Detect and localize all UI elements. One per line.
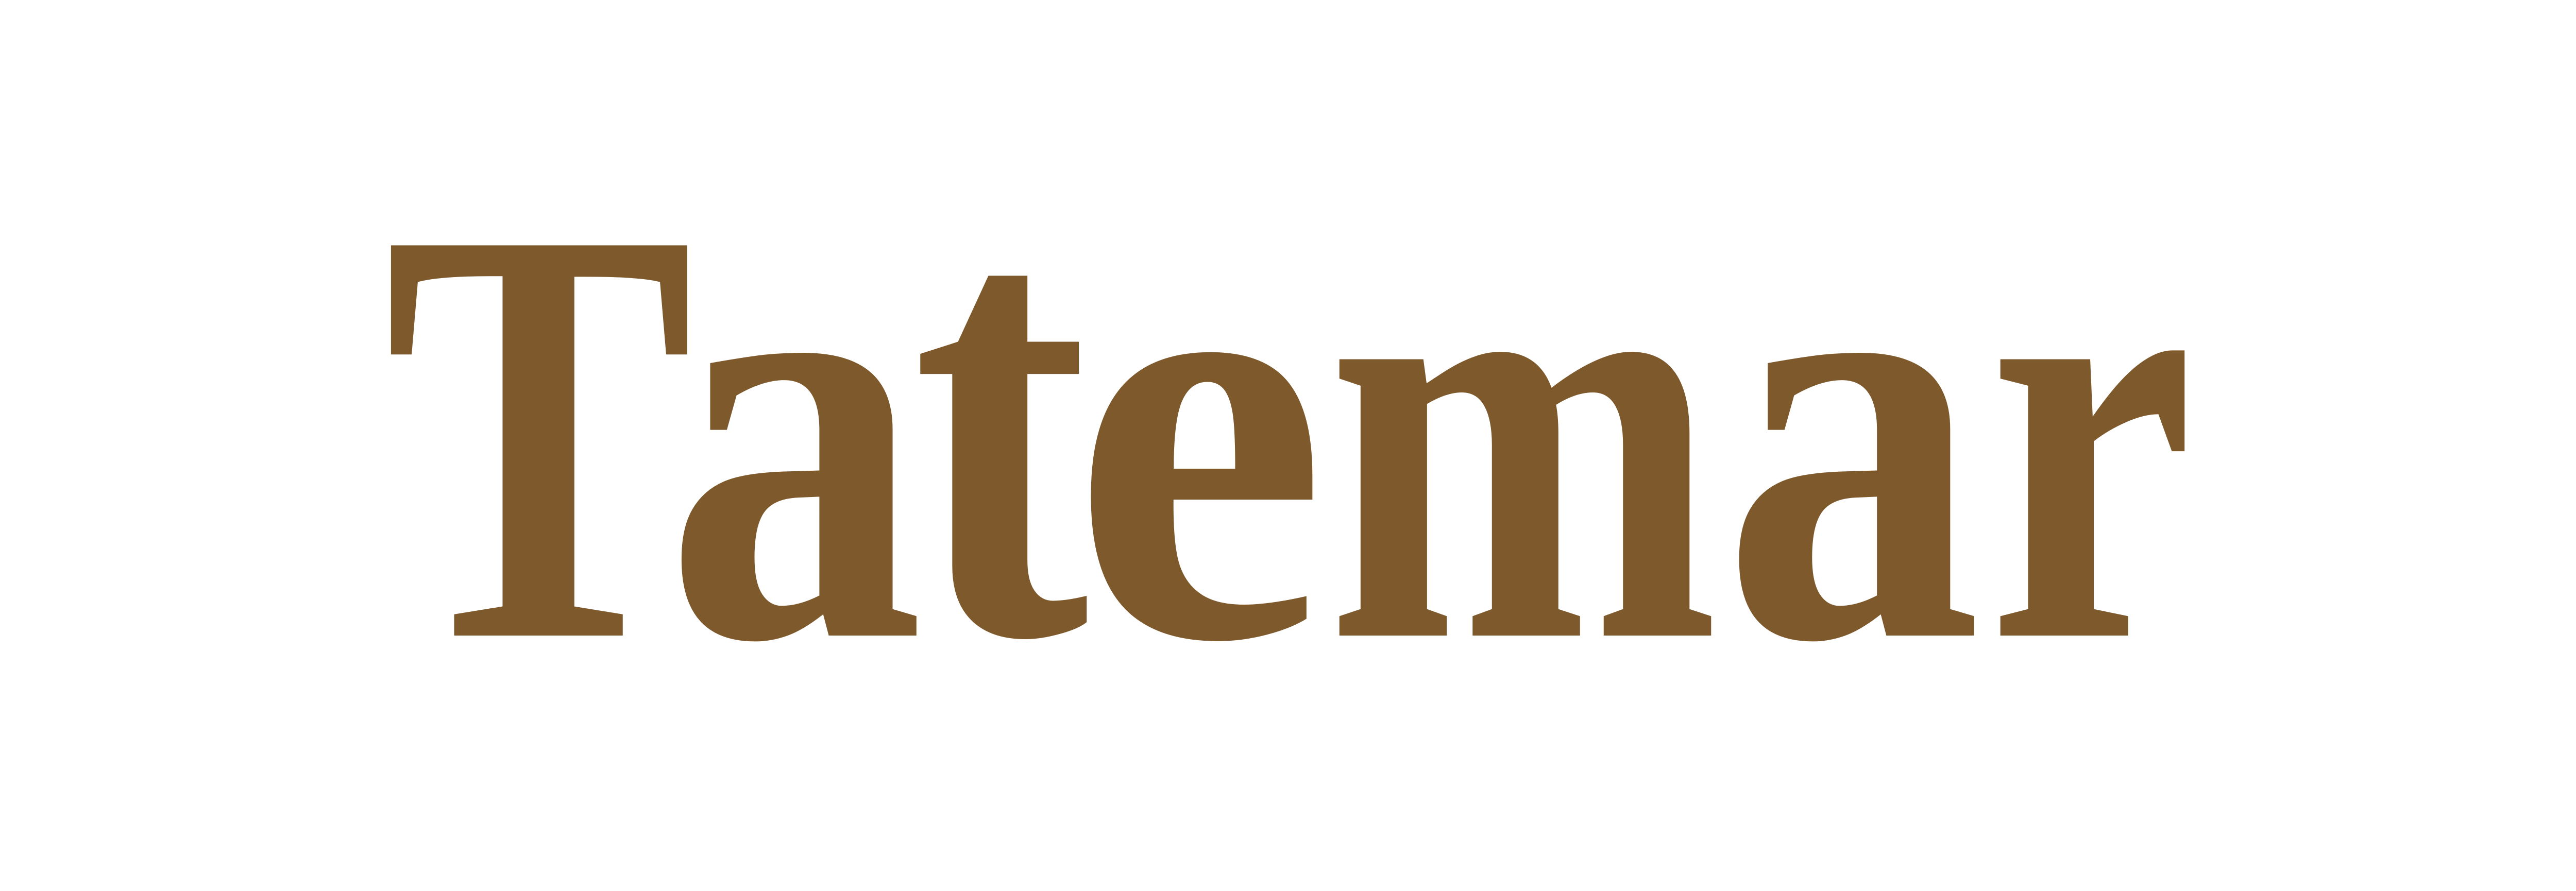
letter: t: t — [912, 67, 1095, 770]
letter: e: e — [1071, 98, 1327, 766]
letter: m: m — [1327, 100, 1719, 766]
letter: a: a — [665, 99, 924, 766]
letter: a (second): a — [1722, 99, 1982, 766]
letter: r: r — [1988, 100, 2195, 766]
letter: T: T — [384, 105, 694, 765]
